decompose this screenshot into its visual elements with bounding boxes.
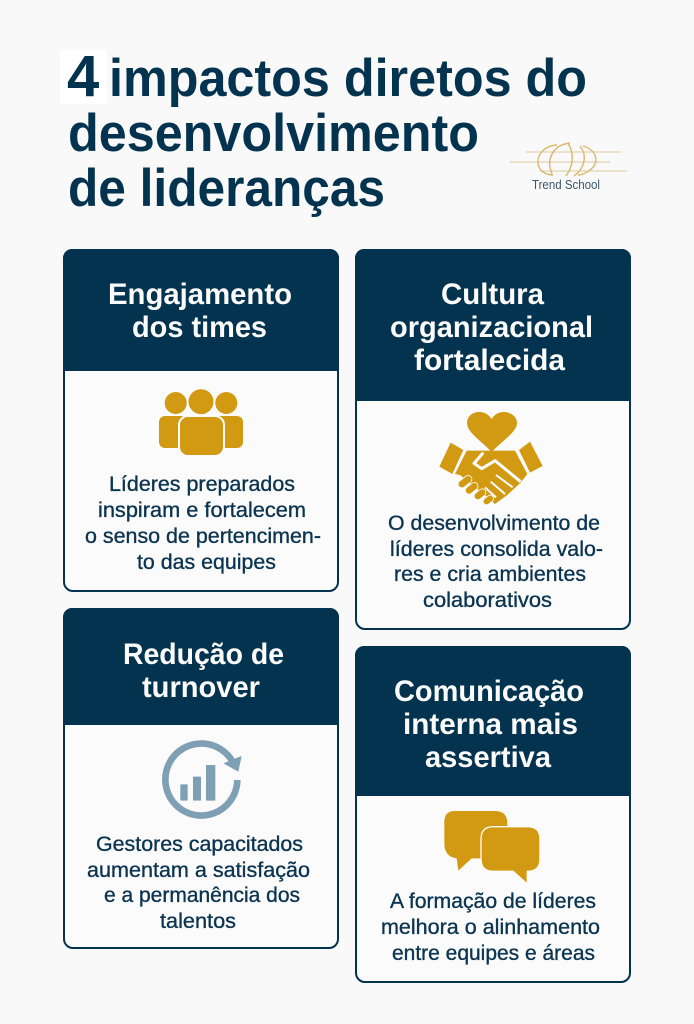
header: turnover: turnover xyxy=(142,671,260,704)
header: cultura xyxy=(355,249,631,401)
header: cultura: organizacional xyxy=(390,311,593,344)
header: engajamento xyxy=(63,249,339,371)
title: desenvolvimento xyxy=(68,104,479,163)
text: engajamento: inspiram e fortalecem xyxy=(98,499,306,522)
title: impactos diretos do xyxy=(109,49,587,108)
text: cultura xyxy=(388,512,603,612)
title: de lideranças xyxy=(68,159,385,218)
header: cultura: Cultura xyxy=(441,278,545,311)
icon: people xyxy=(159,389,243,456)
icon: heart and handshake xyxy=(439,412,543,506)
text: comunicação: entre equipes e áreas xyxy=(392,942,595,965)
header: comunicação xyxy=(355,646,631,796)
text: turnover: talentos xyxy=(160,910,236,933)
text: turnover: e a permanência dos xyxy=(104,884,300,907)
title xyxy=(60,44,587,218)
icon: speech bubbles xyxy=(444,811,539,883)
text: cultura: res e cria ambientes xyxy=(394,563,586,586)
icon: refresh with bars xyxy=(165,744,242,816)
header: comunicação: interna mais xyxy=(403,708,578,741)
panel: engajamento dos times xyxy=(63,249,339,591)
title: 4 xyxy=(67,44,99,109)
header: cultura: fortalecida xyxy=(414,344,566,377)
header: engajamento: Engajamento xyxy=(108,278,292,311)
text: turnover xyxy=(87,833,310,933)
panel: comunicação interna xyxy=(355,646,631,982)
text: turnover: aumentam a satisfação xyxy=(87,859,310,882)
text: engajamento: o senso de pertencimen- xyxy=(85,525,321,548)
text: comunicação xyxy=(381,890,600,965)
panel: redução de turnover xyxy=(63,608,339,948)
logo: Trend School xyxy=(510,143,627,192)
text: comunicação: A formação de líderes xyxy=(390,890,596,913)
text: engajamento: to das equipes xyxy=(137,551,276,574)
header: comunicação: Comunicação xyxy=(394,675,584,708)
header: comunicação: assertiva xyxy=(425,741,552,774)
header: engajamento: dos times xyxy=(132,311,267,344)
logo: Trend School: Trend School xyxy=(532,178,600,192)
text: cultura: líderes consolida valo- xyxy=(390,538,603,561)
text: cultura: O desenvolvimento de xyxy=(388,512,600,535)
text: cultura: colaborativos xyxy=(423,589,552,612)
text: comunicação: melhora o alinhamento xyxy=(381,916,600,939)
panel: cultura organizacional xyxy=(355,249,631,629)
text: engajamento xyxy=(85,473,321,574)
header: turnover xyxy=(63,608,339,725)
text: turnover: Gestores capacitados xyxy=(96,833,303,856)
text: engajamento: Líderes preparados xyxy=(109,473,295,496)
header: turnover: Redução de xyxy=(123,638,284,671)
